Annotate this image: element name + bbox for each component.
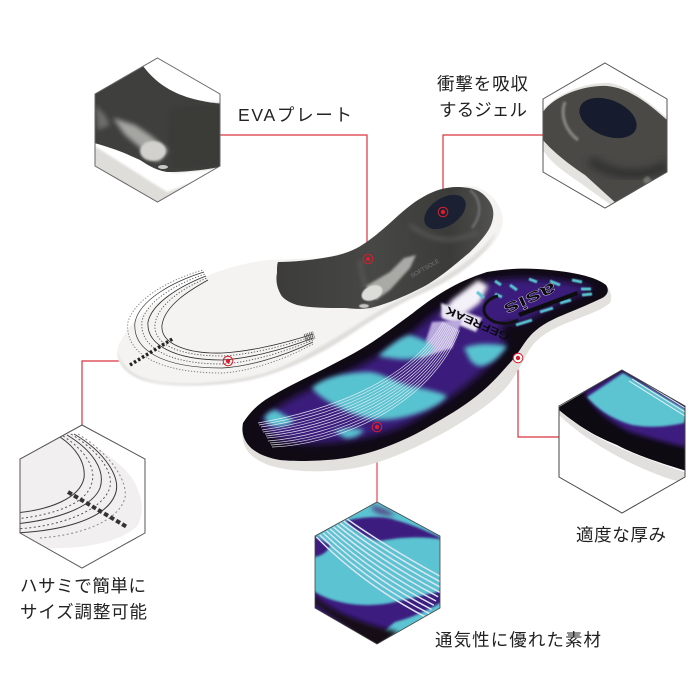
label: gel: するジェル	[439, 100, 527, 120]
EVA dark plate	[276, 187, 493, 309]
label: trim guide: ハサミで簡単に	[20, 576, 146, 596]
marker: gel	[438, 207, 448, 217]
printed cover	[242, 268, 608, 461]
plate micro text: SOFTSOLE	[410, 259, 441, 280]
hexagon: thickness closeup	[555, 365, 690, 515]
white sole base	[117, 186, 503, 384]
connector: gel	[443, 135, 543, 212]
lavender strip under wordmark	[420, 320, 462, 358]
marker: thickness	[513, 353, 523, 363]
cyan blobs	[264, 335, 507, 438]
printed logo: asis	[501, 278, 560, 320]
logo bar	[518, 291, 578, 317]
hotspot markers	[223, 207, 523, 432]
hexagon: EVA plate closeup	[94, 58, 220, 202]
label: trim guide	[20, 576, 147, 622]
light patch behind wordmark	[441, 303, 482, 332]
insole: underside with EVA plate	[117, 186, 503, 386]
connector: EVA plate	[220, 135, 367, 258]
purple field	[262, 279, 595, 443]
foam base	[243, 285, 611, 471]
label: breathable material: 通気性に優れた素材	[435, 630, 601, 650]
marker: breathable material	[372, 422, 382, 432]
cyan dashes around logo	[477, 279, 592, 325]
hexagon: gel closeup	[542, 62, 668, 209]
printed logo arc	[484, 296, 518, 323]
label: thickness: 適度な厚み	[576, 525, 666, 545]
white streak near logo	[440, 280, 488, 316]
marker: trim guide	[223, 356, 233, 366]
trim guide lines on sole	[128, 270, 314, 373]
label: EVA plate: EVAプレート	[238, 105, 352, 125]
stripe bundle	[258, 322, 460, 447]
brand wordmark: GEFREAK	[444, 304, 511, 342]
gel rim	[470, 190, 479, 228]
plate highlight	[359, 255, 416, 308]
hexagon: breathable material closeup	[314, 502, 440, 644]
connector: thickness	[518, 358, 559, 437]
gel capsule	[418, 188, 472, 236]
marker: EVA plate	[363, 254, 373, 264]
connector: trim guide	[82, 361, 228, 425]
sole lower rim shadow	[118, 232, 496, 386]
label: gel	[437, 74, 528, 120]
plate arch crease shading	[360, 225, 478, 306]
insole: top side with printed cover	[230, 260, 620, 471]
label: gel: 衝撃を吸収	[437, 74, 528, 94]
label: trim guide: サイズ調整可能	[20, 602, 147, 622]
connector: breathable material	[376, 427, 378, 502]
hexagon: trim guide closeup	[20, 424, 146, 569]
